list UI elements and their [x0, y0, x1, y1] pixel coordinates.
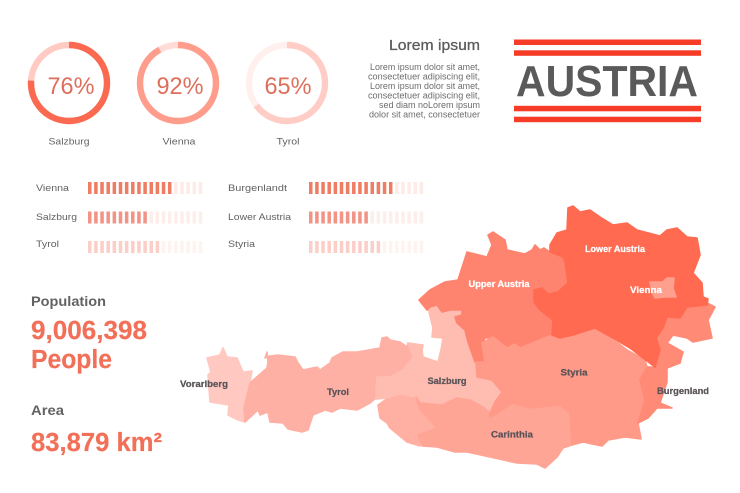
region: Vienna: [650, 278, 676, 298]
label: Salzburg: Salzburg: [428, 376, 466, 386]
bar chart: regions left: [36, 183, 203, 250]
label: Burgenland: Burgenland: [657, 386, 709, 396]
text block: Lorem ipsum: Lorem ipsum dolor sit amet,: [370, 81, 480, 91]
bar chart: regions left: Salzburg: [36, 212, 77, 223]
donut: Salzburg 76%: 76%: [48, 73, 94, 100]
donut: Tyrol 65%: [249, 45, 325, 148]
label: Styria: Styria: [560, 368, 588, 378]
bar chart: regions right: Burgenlandt: [228, 183, 287, 194]
donut: Vienna 92%: [140, 45, 216, 148]
donut: Salzburg 76%: Salzburg: [48, 136, 90, 148]
bar chart: regions right: Styria: [228, 239, 256, 250]
text block: Lorem ipsum: consectetuer adipiscing elit,: [368, 72, 480, 82]
stat: population: [31, 293, 147, 374]
region: Burgenland: [638, 303, 715, 423]
label: Vienna: Vienna: [630, 285, 662, 295]
label: Upper Austria: Upper Austria: [468, 279, 530, 289]
stat: area: Area: [31, 402, 64, 418]
region: Upper Austria: [419, 232, 568, 362]
stat: population: 9,006,398: [31, 317, 147, 345]
title: AUSTRIA with red stripes: AUSTRIA: [516, 58, 698, 106]
donut: Vienna 92%: 92%: [156, 73, 204, 100]
region: Salzburg: [376, 305, 502, 413]
text block: Lorem ipsum: [368, 38, 480, 120]
map of Austria: [180, 206, 715, 468]
region: Carinthia: [416, 397, 572, 468]
region: Vorarlberg: [207, 348, 252, 422]
stat: area: [31, 402, 162, 457]
donut: Salzburg 76%: [31, 45, 107, 148]
bar chart: regions left: Vienna: [36, 183, 70, 194]
bar chart: regions right: [228, 183, 424, 250]
donut: Vienna 92%: Vienna: [162, 136, 196, 148]
region: East Tyrol: [378, 394, 437, 446]
text block: Lorem ipsum: consectetuer adipiscing elit,: [368, 90, 480, 100]
text block: Lorem ipsum: Lorem ipsum: [389, 38, 480, 54]
bar chart: regions left: Tyrol: [36, 239, 59, 250]
text block: Lorem ipsum: dolor sit amet, consectetuer: [369, 110, 480, 120]
region: Lower Austria: [534, 206, 708, 367]
text block: Lorem ipsum: sed diam noLorem ipsum: [379, 100, 480, 110]
label: Lower Austria: Lower Austria: [585, 244, 645, 254]
stat: population: People: [31, 346, 112, 374]
title: AUSTRIA with red stripes: [514, 40, 701, 122]
bar chart: regions right: Lower Austria: [228, 212, 292, 223]
label: Carinthia: Carinthia: [491, 430, 533, 440]
label: Vorarlberg: Vorarlberg: [180, 379, 228, 389]
region: Styria: [476, 328, 647, 446]
text block: Lorem ipsum: Lorem ipsum dolor sit amet,: [370, 62, 480, 72]
donut: Tyrol 65%: Tyrol: [276, 136, 300, 148]
stat: area: 83,879 km²: [31, 429, 162, 457]
label: Tyrol: Tyrol: [327, 387, 349, 397]
region: Tyrol: [244, 337, 413, 432]
stat: population: Population: [31, 293, 106, 309]
donut: Tyrol 65%: 65%: [264, 73, 312, 100]
